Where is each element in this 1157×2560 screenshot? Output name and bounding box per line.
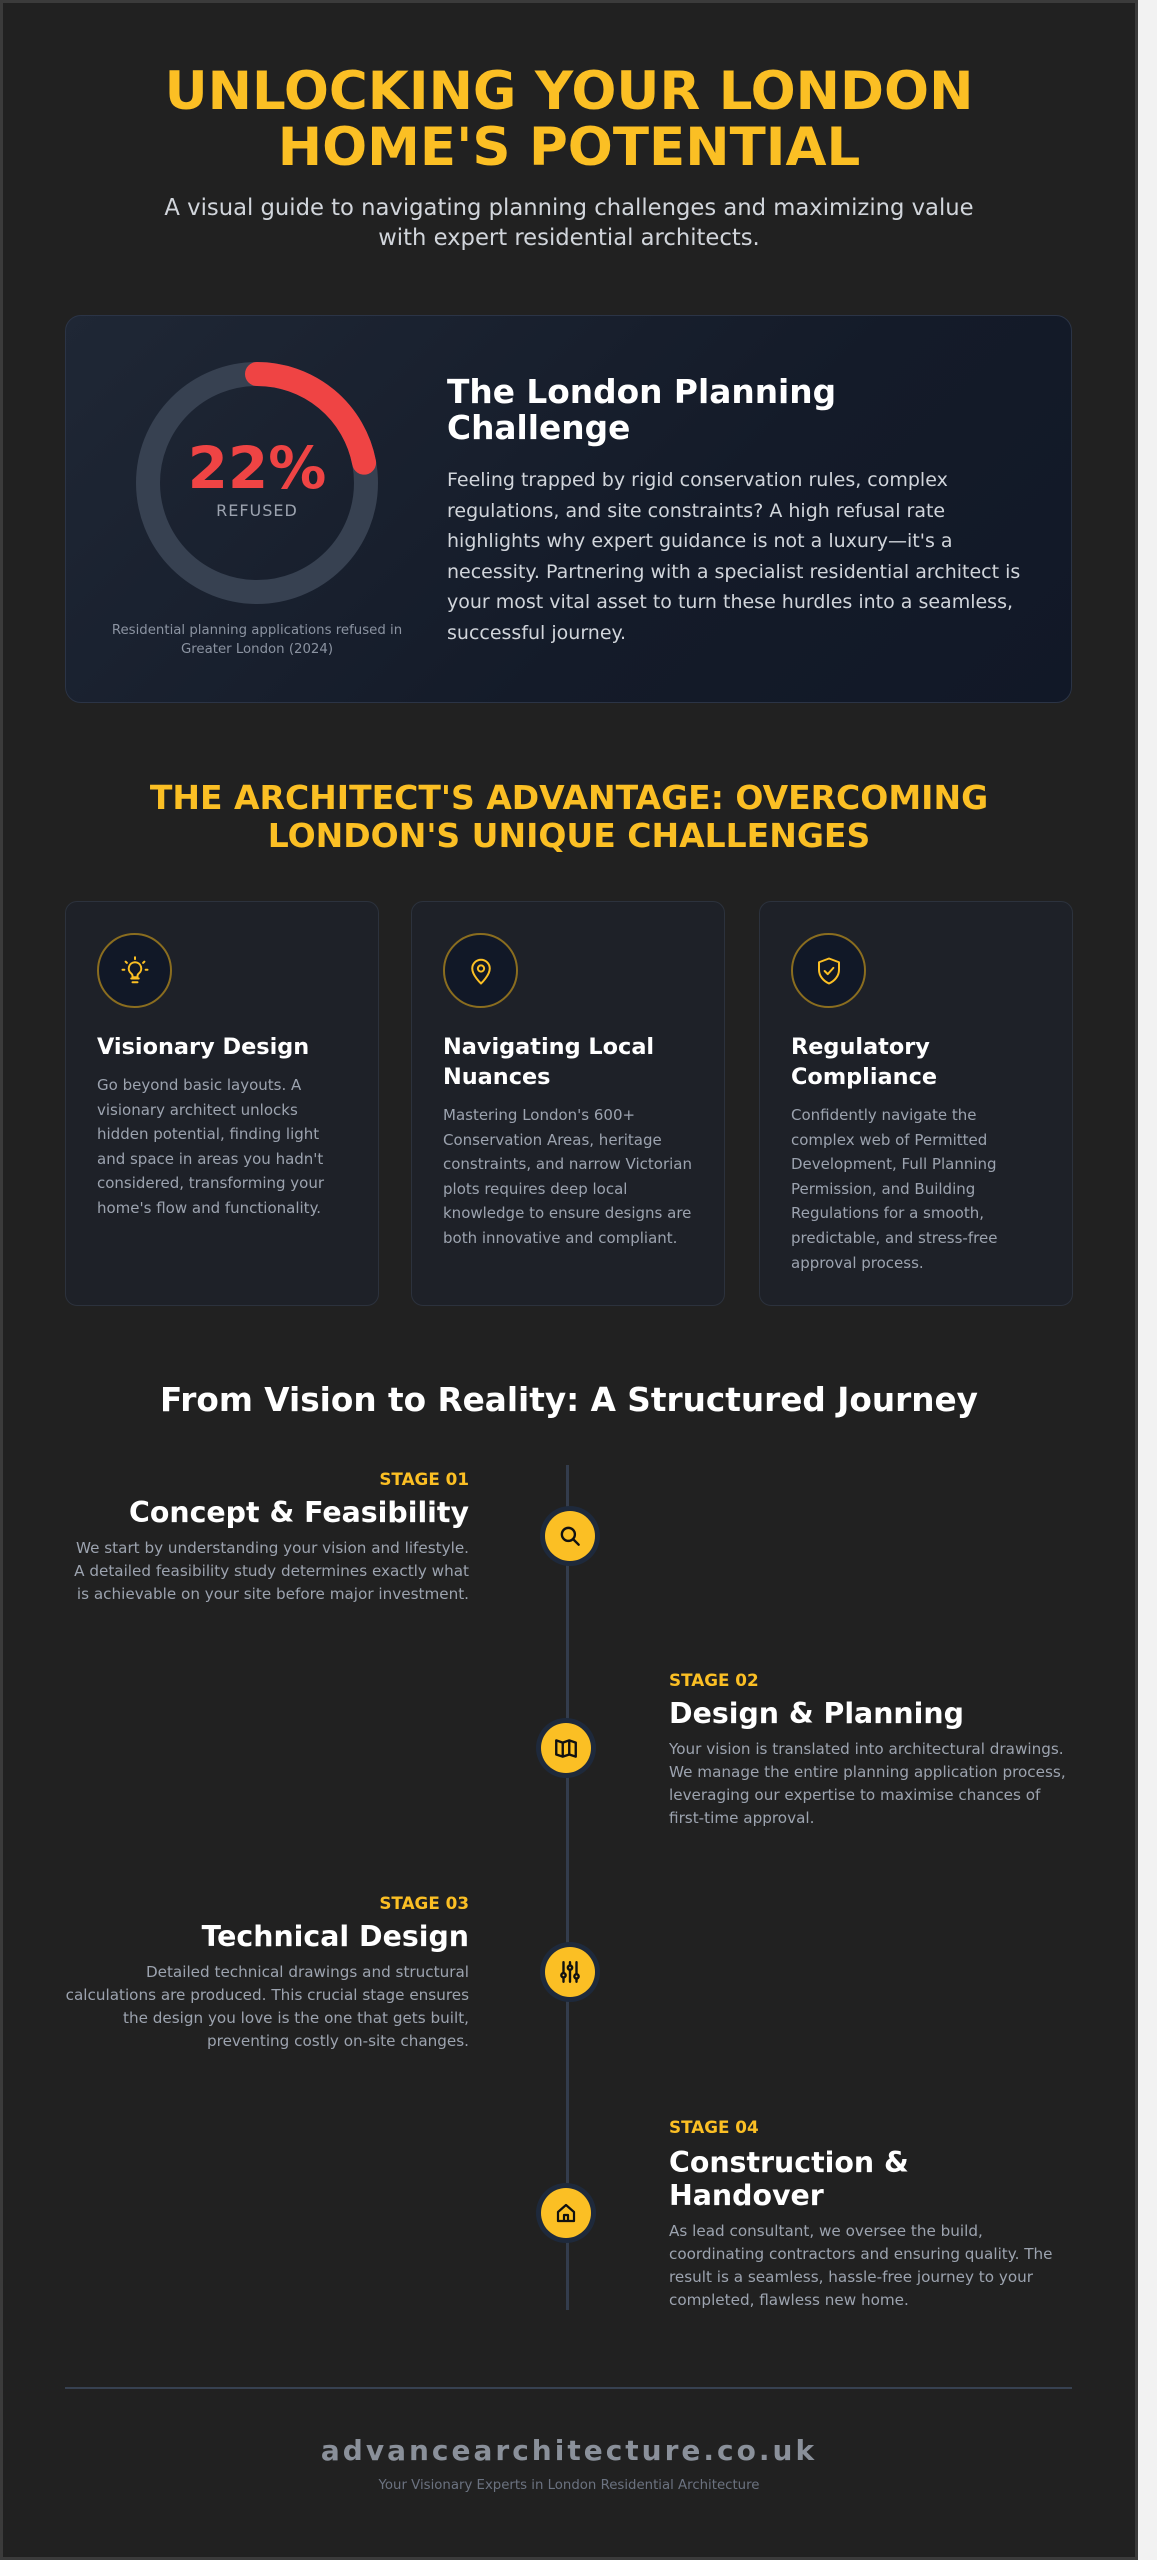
stage 04 text: result is a seamless, hassle-free journey to your bbox=[669, 2268, 1033, 2286]
stage 01 text: A detailed feasibility study determines exactly what bbox=[74, 1562, 469, 1580]
card text: considered, transforming your bbox=[97, 1174, 324, 1192]
card text: approval process. bbox=[791, 1254, 924, 1272]
footer: website: advancearchitecture.co.uk bbox=[321, 2434, 817, 2467]
subtitle: with expert residential architects. bbox=[378, 225, 760, 251]
stage 04 text: Construction & bbox=[669, 2146, 909, 2178]
panel heading: Challenge bbox=[447, 409, 630, 447]
panel: london planning challenge bbox=[65, 315, 1072, 703]
chart caption: Residential planning applications refused in bbox=[112, 623, 402, 638]
title bbox=[165, 61, 973, 178]
card text: Mastering London's 600+ bbox=[443, 1106, 635, 1124]
panel heading bbox=[447, 373, 836, 447]
section heading: architect's advantage: THE ARCHITECT'S ADVANTAGE: OVERCOMING bbox=[150, 778, 988, 817]
card text: home's flow and functionality. bbox=[97, 1199, 321, 1217]
icon: shield check bbox=[791, 933, 866, 1008]
stage 03 text: calculations are produced. This crucial stage ensures bbox=[66, 1986, 469, 2004]
stage 01 text: We start by understanding your vision and lifestyle. bbox=[76, 1538, 469, 1556]
card text: Confidently navigate the bbox=[791, 1106, 977, 1124]
footer: tagline: Your Visionary Experts in London Residential Architecture bbox=[379, 2478, 759, 2493]
card text: complex web of Permitted bbox=[791, 1131, 987, 1149]
card text: plots requires deep local bbox=[443, 1180, 627, 1198]
panel paragraph: regulations, and site constraints? A high refusal rate bbox=[447, 500, 945, 522]
stage 04 text: As lead consultant, we oversee the build, bbox=[669, 2222, 983, 2240]
card text: hidden potential, finding light bbox=[97, 1125, 319, 1143]
panel paragraph: Feeling trapped by rigid conservation rules, complex bbox=[447, 469, 948, 491]
chart caption: Greater London (2024) bbox=[181, 642, 333, 657]
stage 02 text: Design & Planning bbox=[669, 1697, 964, 1730]
card title bbox=[443, 1034, 654, 1090]
panel paragraph: successful journey. bbox=[447, 622, 626, 644]
card: visionary design bbox=[65, 901, 379, 1306]
card title bbox=[791, 1034, 937, 1090]
stage 02 text: Your vision is translated into architectural drawings. bbox=[669, 1740, 1064, 1758]
stage 03 text: the design you love is the one that gets built, bbox=[123, 2008, 469, 2026]
card text: constraints, and narrow Victorian bbox=[443, 1155, 692, 1173]
stage 01 text bbox=[74, 1469, 469, 1602]
stat label: REFUSED bbox=[216, 501, 298, 520]
icon: stage 01 search bbox=[540, 1506, 600, 1566]
panel heading: The London Planning bbox=[447, 373, 836, 411]
card text: and space in areas you hadn't bbox=[97, 1150, 323, 1168]
card text: Go beyond basic layouts. A bbox=[97, 1076, 301, 1094]
stage 03 text: preventing costly on-site changes. bbox=[207, 2032, 469, 2050]
stage 04 text: coordinating contractors and ensuring quality. The bbox=[669, 2244, 1052, 2262]
card title: Navigating Local bbox=[443, 1034, 654, 1060]
stage 03 text: STAGE 03 bbox=[379, 1893, 469, 1913]
stage 04 text: Handover bbox=[669, 2178, 824, 2212]
card text: Regulations for a smooth, bbox=[791, 1204, 984, 1222]
card title: Nuances bbox=[443, 1064, 551, 1090]
subtitle bbox=[164, 195, 974, 251]
timeline line bbox=[566, 1465, 569, 2310]
card text: Permission, and Building bbox=[791, 1180, 975, 1198]
title: HOME'S POTENTIAL bbox=[278, 117, 860, 178]
card text bbox=[443, 1106, 692, 1247]
card text: both innovative and compliant. bbox=[443, 1229, 677, 1247]
card text bbox=[791, 1106, 997, 1272]
subtitle: A visual guide to navigating planning challenges and maximizing value bbox=[164, 195, 974, 221]
panel paragraph bbox=[447, 469, 1020, 644]
card title: Visionary Design bbox=[97, 1034, 309, 1060]
stage 02 text: We manage the entire planning application process, bbox=[669, 1762, 1066, 1780]
section heading: architect's advantage: LONDON'S UNIQUE CHALLENGES bbox=[268, 816, 870, 855]
section heading: architect's advantage bbox=[150, 778, 988, 855]
panel paragraph: necessity. Partnering with a specialist residential architect is bbox=[447, 560, 1020, 582]
stage 01 text: is achievable on your site before major investment. bbox=[77, 1584, 469, 1602]
stage 02 text: STAGE 02 bbox=[669, 1670, 759, 1690]
stage 03 text bbox=[66, 1893, 469, 2050]
stage 02 text: leveraging our expertise to maximise chances of bbox=[669, 1786, 1040, 1804]
stage 04 text: STAGE 04 bbox=[669, 2117, 759, 2137]
panel paragraph: your most vital asset to turn these hurdles into a seamless, bbox=[447, 591, 1013, 613]
title: UNLOCKING YOUR LONDON bbox=[165, 61, 973, 122]
stat value: 22% bbox=[188, 434, 326, 502]
stage 02 text: first-time approval. bbox=[669, 1808, 814, 1826]
section heading: journey: From Vision to Reality: A Structured Journey bbox=[160, 1381, 978, 1419]
card text: visionary architect unlocks bbox=[97, 1101, 298, 1119]
card text: Development, Full Planning bbox=[791, 1155, 997, 1173]
donut chart: 22% refused bbox=[136, 362, 378, 604]
panel paragraph: highlights why expert guidance is not a luxury—it's a bbox=[447, 530, 953, 552]
icon: stage 04 home bbox=[536, 2183, 596, 2243]
stage 04 text: completed, flawless new home. bbox=[669, 2290, 909, 2308]
stage 03 text: Detailed technical drawings and structural bbox=[146, 1962, 469, 1980]
stage 02 text bbox=[669, 1670, 1066, 1826]
icon: lightbulb bbox=[97, 933, 172, 1008]
card text: predictable, and stress-free bbox=[791, 1229, 997, 1247]
card text: Conservation Areas, heritage bbox=[443, 1131, 662, 1149]
chart caption bbox=[112, 623, 402, 657]
stage 01 text: STAGE 01 bbox=[379, 1469, 469, 1489]
footer divider bbox=[65, 2387, 1072, 2389]
icon: stage 02 map bbox=[536, 1718, 596, 1778]
stage 04 text bbox=[669, 2117, 1052, 2308]
card title: Regulatory bbox=[791, 1034, 930, 1060]
stage 03 text: Technical Design bbox=[202, 1920, 469, 1953]
card: navigating local nuances bbox=[411, 901, 725, 1306]
icon: stage 03 sliders bbox=[540, 1942, 600, 2002]
card: regulatory compliance bbox=[759, 901, 1073, 1306]
card text: knowledge to ensure designs are bbox=[443, 1204, 691, 1222]
stage 01 text: Concept & Feasibility bbox=[129, 1496, 469, 1529]
card title: Compliance bbox=[791, 1064, 937, 1090]
icon: map pin bbox=[443, 933, 518, 1008]
card text bbox=[97, 1076, 324, 1217]
